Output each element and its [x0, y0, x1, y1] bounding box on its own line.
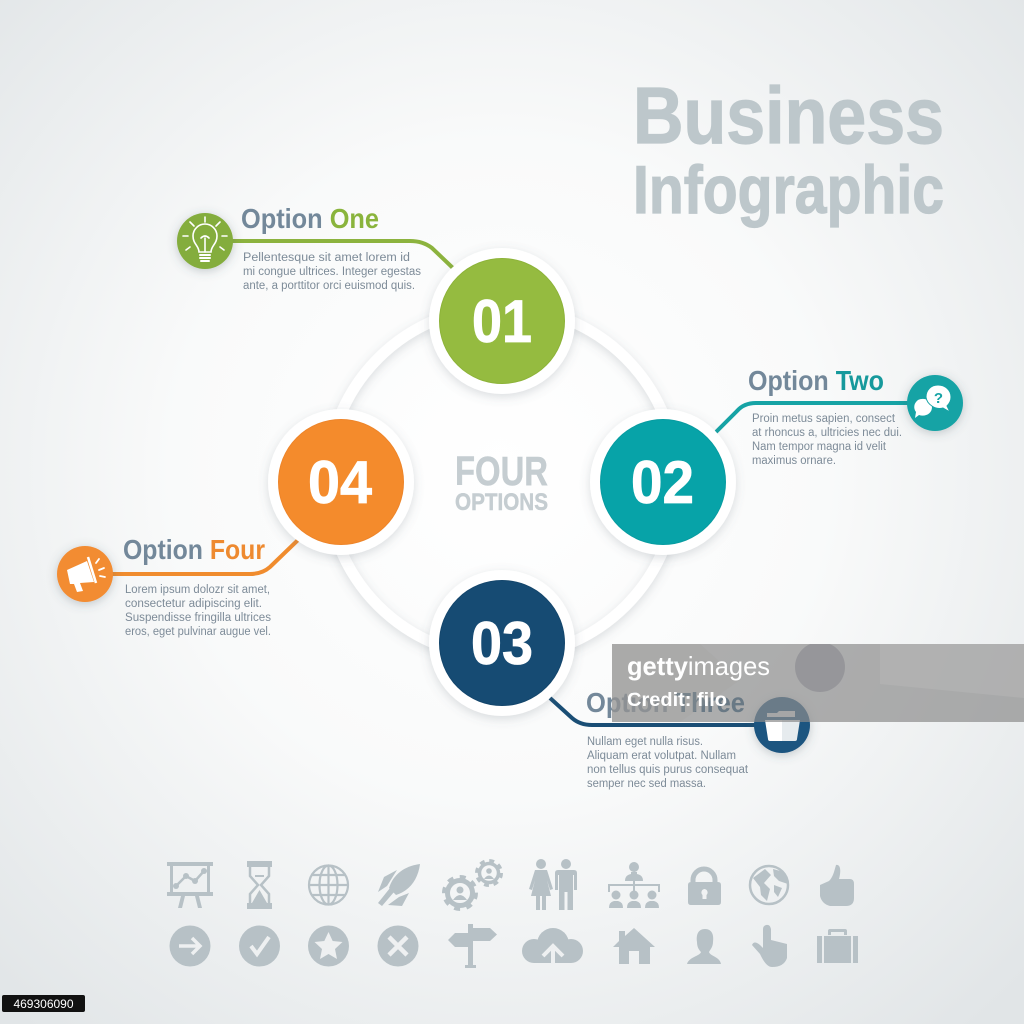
icon: speech bubbles: ? — [934, 390, 943, 407]
icon: rocket — [378, 864, 420, 906]
icon: padlock — [688, 869, 721, 905]
icon: folder — [754, 697, 810, 753]
panel: option four — [57, 534, 298, 638]
center label: FOUR — [455, 448, 548, 494]
icon: couple — [529, 859, 577, 910]
text: option three: Nullam eget nulla risus. — [587, 736, 703, 748]
icon: earth — [750, 866, 788, 904]
text: option four: consectetur adipiscing elit. — [125, 598, 262, 610]
text: option two: at rhoncus a, ultricies nec dui. — [752, 427, 902, 439]
icon row: top — [167, 859, 854, 910]
title: Business — [633, 71, 944, 160]
icon: org chart — [608, 862, 660, 908]
text: option two: Nam tempor magna id velit — [752, 441, 887, 453]
panel: option two — [715, 365, 963, 467]
text: option three: semper nec sed massa. — [587, 778, 706, 790]
heading: option three: Option Three — [586, 687, 745, 718]
icon: arrow circle — [170, 926, 210, 966]
icon: cross circle — [378, 926, 418, 966]
connector ring — [327, 307, 677, 657]
panel: option three — [550, 687, 810, 790]
node 02: 02 — [631, 449, 694, 516]
text: option two — [752, 413, 902, 467]
watermark logo: gettyimages — [627, 651, 770, 681]
node 01 — [429, 248, 575, 394]
heading: option four: Option Four — [123, 534, 265, 565]
icon: speech bubbles — [907, 375, 963, 431]
image id tag: 469306090 — [13, 997, 74, 1011]
text: option two: Proin metus sapien, consect — [752, 413, 896, 425]
image id tag — [2, 995, 85, 1012]
icon: gears — [444, 860, 502, 909]
node 04 — [268, 409, 414, 555]
text: option one: Pellentesque sit amet lorem id — [243, 252, 410, 264]
center label — [455, 448, 548, 516]
text: option one: ante, a porttitor orci euismod quis. — [243, 280, 415, 292]
text: option four: eros, eget pulvinar augue vel. — [125, 626, 271, 638]
text: option three: Aliquam erat volutpat. Nullam — [587, 750, 736, 762]
icon: wireframe globe — [309, 865, 348, 905]
title: Infographic — [633, 152, 944, 228]
icon: thumbs up — [820, 865, 854, 906]
icon: megaphone — [57, 546, 113, 602]
icon: check circle — [239, 926, 280, 966]
node 04: 04 — [308, 449, 373, 516]
connector line: four — [85, 540, 298, 574]
icon: light bulb — [177, 213, 233, 269]
icon: person bust — [687, 929, 721, 964]
text: option one: mi congue ultrices. Integer egestas — [243, 266, 421, 278]
watermark banner — [612, 642, 1024, 722]
connector line: three — [550, 698, 782, 725]
icon: hourglass — [247, 861, 272, 909]
text: option three — [587, 736, 749, 790]
text: option four: Suspendisse fringilla ultrices — [125, 612, 271, 624]
title — [633, 71, 944, 228]
text: option three: non tellus quis purus consequat — [587, 764, 749, 776]
node 01: 01 — [472, 288, 532, 355]
connector line: two — [715, 403, 935, 433]
icon: house — [613, 928, 655, 964]
icon: star circle — [308, 926, 349, 966]
icon: briefcase — [817, 929, 858, 963]
text: option two: maximus ornare. — [752, 455, 836, 467]
icon: pointing hand — [752, 925, 787, 967]
node 02 — [590, 409, 736, 555]
panel: option one — [177, 203, 455, 292]
icon: cloud upload — [522, 928, 583, 964]
center label: OPTIONS — [455, 489, 548, 516]
icon: signpost — [448, 924, 497, 968]
text: option four: Lorem ipsum dolozr sit amet, — [125, 584, 270, 596]
heading: option two: Option Two — [748, 365, 884, 396]
icon row: bottom — [170, 924, 858, 968]
text: option four — [125, 584, 271, 638]
heading: option one: Option One — [241, 203, 379, 234]
node 03 — [429, 570, 575, 716]
connector line: one — [205, 241, 455, 270]
node 03: 03 — [471, 610, 533, 677]
icon: presentation board — [167, 862, 213, 908]
watermark credit: Credit: filo — [627, 690, 727, 711]
text: option one — [243, 252, 421, 292]
